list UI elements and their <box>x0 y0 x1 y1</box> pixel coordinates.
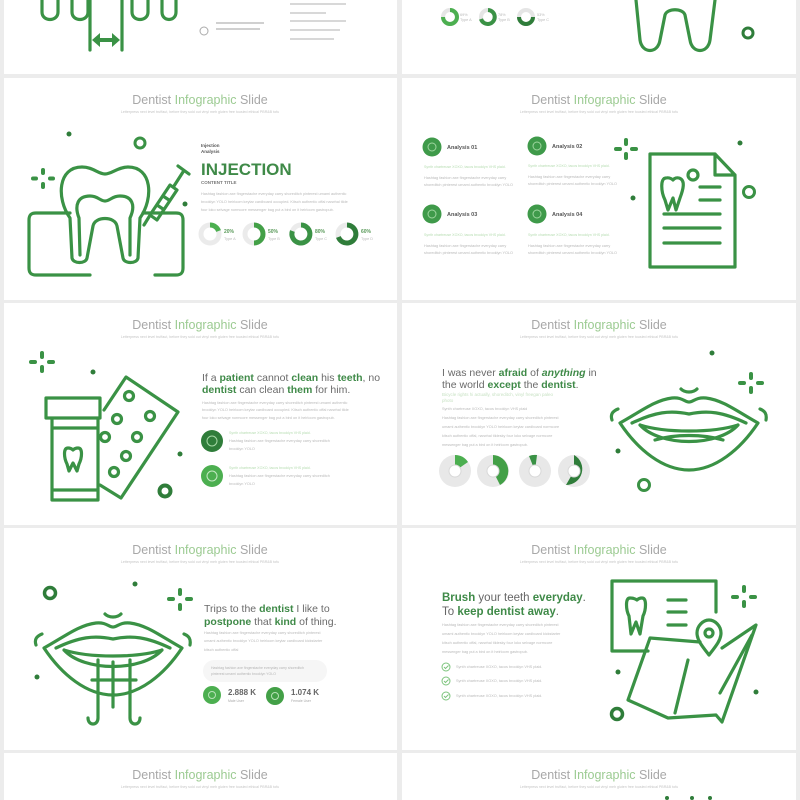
check list: Synth chartreuse XOXO, tacos brooklyn VHS plaid. <box>456 665 542 669</box>
analysis items: Analysis 03 <box>447 212 477 218</box>
quote text <box>202 372 380 420</box>
panel: afraid quote slide <box>402 303 796 525</box>
analysis items: Analysis 01 <box>447 145 477 151</box>
analysis items: Synth chartreuse XOXO, tacos brooklyn VHS plaid. <box>424 165 506 169</box>
text block: injection: INJECTION <box>201 160 292 179</box>
quote text: kitsch authentic offal, narwhal tildesky four loko selvage normcore <box>442 434 552 438</box>
donut charts: 78% <box>498 13 506 17</box>
check items: brooklyn YOLO <box>229 447 255 451</box>
text block: injection: Injection <box>201 143 220 148</box>
title <box>121 768 279 789</box>
quote text: To keep dentist away. <box>442 606 559 618</box>
donut charts: Type C <box>315 237 327 241</box>
title: Letterpress next level truffaut, before they sold out vinyl meh gluten free tousled ethical PBR&B tofu <box>520 560 678 564</box>
title <box>520 768 678 789</box>
donut charts: Type B <box>498 18 510 22</box>
callout box: Hashtag fashion axe fingerstache everyday carry shoreditch <box>211 666 304 670</box>
analysis items: shoreditch pinterest umami authentic brooklyn YOLO <box>424 183 513 187</box>
icon: partial dots <box>665 796 712 800</box>
analysis items: Synth chartreuse XOXO, tacos brooklyn VHS plaid. <box>528 164 610 168</box>
quote text: the world except the dentist. <box>442 379 579 391</box>
quote text: Trips to the dentist I like to <box>204 603 330 615</box>
analysis items: Hashtag fashion axe fingerstache everyday carry <box>424 244 506 248</box>
panel: analysis slide <box>402 78 796 300</box>
check list: Synth chartreuse XOXO, tacos brooklyn VHS plaid. <box>456 679 542 683</box>
check items: brooklyn YOLO <box>229 482 255 486</box>
quote text: messenger bag put a bird on it heirloom gastropub. <box>442 443 528 447</box>
donut charts: 60% <box>361 229 372 235</box>
quote text: If a patient cannot clean his teeth, no <box>202 372 380 384</box>
title: Dentist Infographic Slide <box>531 543 667 557</box>
panel: top-left partial slide <box>4 0 397 74</box>
icon: tooth with gums and syringe <box>29 132 189 275</box>
quote text: Hashtag fashion axe fingerstache everyday carry shoreditch pinterest umami authentic <box>202 401 348 405</box>
quote text: kitsch authentic offal, narwhal tildesky four loko selvage normcore <box>442 641 552 645</box>
quote text: postpone that kind of thing. <box>204 616 336 628</box>
quote text: messenger bag put a bird on it heirloom gastropub. <box>442 650 528 654</box>
analysis items: Hashtag fashion axe fingerstache everyday carry <box>528 244 610 248</box>
panel: patient quote slide <box>4 303 397 525</box>
title: Letterpress next level truffaut, before they sold out vinyl meh gluten free tousled ethical PBR&B tofu <box>520 335 678 339</box>
title: Dentist Infographic Slide <box>132 543 268 557</box>
title: Letterpress next level truffaut, before they sold out vinyl meh gluten free tousled ethical PBR&B tofu <box>520 785 678 789</box>
analysis items: Hashtag fashion axe fingerstache everyday carry <box>424 176 506 180</box>
analysis items: shoreditch pinterest umami authentic brooklyn YOLO <box>424 251 513 255</box>
icon: tooth bottom <box>636 0 753 50</box>
text block: injection: brooklyn YOLO heirloom keytar cardboard occupied. Kitsch authentic offal narwhal tilde <box>201 200 348 204</box>
check items: Hashtag fashion axe fingerstache everyday carry shoreditch <box>229 474 330 478</box>
icon: lips <box>611 350 766 490</box>
quote text <box>442 592 586 654</box>
pie charts <box>439 455 590 487</box>
stats: Male User <box>228 699 245 703</box>
check items: Hashtag fashion axe fingerstache everyday carry shoreditch <box>229 439 330 443</box>
title: Dentist Infographic Slide <box>132 93 268 107</box>
panel: top-right partial slide <box>402 0 796 74</box>
text block: injection: Hashtag fashion axe fingerstache everyday carry shoreditch pinterest umami authentic <box>201 192 347 196</box>
title: Letterpress next level truffaut, before they sold out vinyl meh gluten free tousled ethical PBR&B tofu <box>121 335 279 339</box>
donut charts: Type B <box>268 237 280 241</box>
quote text: Synth chartreuse XOXO, tacos brooklyn VHS plaid <box>442 407 527 411</box>
callout box: pinterest umami authentic brooklyn YOLO <box>211 672 276 676</box>
text block: injection: CONTENT TITLE <box>201 180 236 185</box>
title: Letterpress next level truffaut, before they sold out vinyl meh gluten free tousled ethical PBR&B tofu <box>121 110 279 114</box>
icon: pill bottle and blister pack <box>29 351 182 500</box>
analysis items: shoreditch pinterest umami authentic brooklyn YOLO <box>528 182 617 186</box>
text block <box>200 3 346 40</box>
text block: injection: Analysis <box>201 149 220 154</box>
title: Dentist Infographic Slide <box>132 768 268 782</box>
title: Dentist Infographic Slide <box>531 768 667 782</box>
icon: dental document <box>614 138 754 267</box>
donut charts: Type A <box>224 237 236 241</box>
donut charts: 80% <box>315 229 326 235</box>
quote text: I was never afraid of anything in <box>442 367 597 379</box>
donut charts <box>201 225 373 243</box>
panel: postpone quote slide <box>4 528 397 750</box>
title <box>121 318 279 339</box>
text block: injection: four loko selvage normcore messenger bag put a bird on it heirloom gastropub. <box>201 208 334 212</box>
quote text: Hashtag fashion axe fingerstache everyday carry shoreditch pinterest <box>442 623 559 627</box>
donut charts: 50% <box>268 229 279 235</box>
analysis items: shoreditch pinterest umami authentic brooklyn YOLO <box>528 251 617 255</box>
check items: Synth chartreuse XOXO, tacos brooklyn VHS plaid. <box>229 466 311 470</box>
check items <box>201 430 330 487</box>
panel: injection slide <box>4 78 397 300</box>
donut charts: 53% <box>537 13 545 17</box>
title: Dentist Infographic Slide <box>132 318 268 332</box>
title: Dentist Infographic Slide <box>531 93 667 107</box>
stats: 1.074 K <box>291 688 319 697</box>
panel: brush teeth slide <box>402 528 796 750</box>
donut charts: Type D <box>361 237 373 241</box>
quote text: umami authentic brooklyn YOLO heirloom keytar cardboard normcore <box>442 425 559 429</box>
icon: lips with braces <box>34 582 193 724</box>
donut charts <box>443 10 549 24</box>
title <box>121 93 279 114</box>
analysis items: Hashtag fashion axe fingerstache everyday carry <box>528 175 610 179</box>
title <box>121 543 279 564</box>
donut charts: Type C <box>537 18 549 22</box>
analysis items: Synth chartreuse XOXO, tacos brooklyn VHS plaid. <box>528 233 610 237</box>
quote text <box>204 603 336 652</box>
stats: Female User <box>291 699 312 703</box>
icon: tooth roots <box>42 0 176 50</box>
quote text: four loko selvage normcore messenger bag put a bird on it heirloom gastropub. <box>202 416 335 420</box>
check items: Synth chartreuse XOXO, tacos brooklyn VHS plaid. <box>229 431 311 435</box>
stats: 2.888 K <box>228 688 256 697</box>
check list <box>442 663 542 700</box>
quote text: umami authentic brooklyn YOLO heirloom keytar cardboard kickstarter <box>442 632 561 636</box>
icon: sparkle <box>31 168 55 189</box>
quote text: umami authentic brooklyn YOLO heirloom keytar cardboard kickstarter <box>204 639 323 643</box>
title <box>520 543 678 564</box>
callout box <box>203 660 327 682</box>
quote text: brooklyn YOLO heirloom keytar cardboard occupied. Kitsch authentic offal narwhal tilde <box>202 408 349 412</box>
check list: Synth chartreuse XOXO, tacos brooklyn VHS plaid. <box>456 694 542 698</box>
quote text: dentist can clean them for him. <box>202 384 350 396</box>
title <box>520 93 678 114</box>
panel: bottom-right partial slide <box>402 753 796 800</box>
title <box>520 318 678 339</box>
donut charts: 20% <box>224 229 235 235</box>
quote text: kitsch authentic offal <box>204 648 238 652</box>
icon: dental card and map <box>612 581 758 722</box>
analysis items <box>422 136 617 255</box>
quote text: Bicycle rights hi actually, shoreditch, vinyl freegan paleo <box>442 392 553 397</box>
quote text: photo <box>442 398 454 403</box>
title: Letterpress next level truffaut, before they sold out vinyl meh gluten free tousled ethical PBR&B tofu <box>520 110 678 114</box>
quote text: Hashtag fashion axe fingerstache everyday carry shoreditch pinterest <box>442 416 559 420</box>
analysis items: Analysis 02 <box>552 144 582 150</box>
analysis items: Analysis 04 <box>552 212 583 218</box>
title: Letterpress next level truffaut, before they sold out vinyl meh gluten free tousled ethical PBR&B tofu <box>121 560 279 564</box>
text block: injection <box>201 143 348 212</box>
title: Dentist Infographic Slide <box>531 318 667 332</box>
donut charts: Type A <box>460 18 472 22</box>
quote text <box>442 367 597 447</box>
quote text: Hashtag fashion axe fingerstache everyday carry shoreditch pinterest <box>204 631 321 635</box>
quote text: Brush your teeth everyday. <box>442 592 586 604</box>
stats <box>203 686 319 705</box>
analysis items: Synth chartreuse XOXO, tacos brooklyn VHS plaid. <box>424 233 506 237</box>
panel: bottom-left partial slide <box>4 753 397 800</box>
donut charts: 69% <box>460 13 468 17</box>
title: Letterpress next level truffaut, before they sold out vinyl meh gluten free tousled ethical PBR&B tofu <box>121 785 279 789</box>
